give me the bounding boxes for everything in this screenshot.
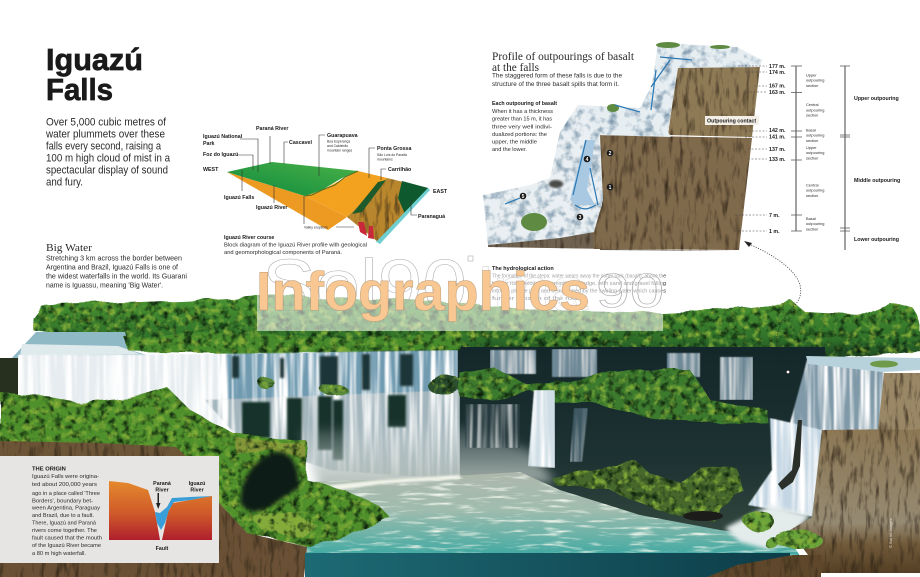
section labels: section bbox=[806, 156, 818, 160]
label: outpouring contact: Outpouring contact bbox=[707, 118, 756, 124]
origin text: Borders', boundary bet- bbox=[32, 498, 93, 504]
text: hydrological action: harder rock below, undermining the ledge, with sand and gravel falling bbox=[492, 281, 666, 287]
section labels: outpouring bbox=[806, 150, 824, 155]
diagram labels: Paraná River bbox=[256, 126, 288, 132]
watermark: Sol90 Infographics: 90 bbox=[596, 265, 664, 318]
diagram labels: Iguazú River bbox=[256, 205, 288, 211]
brown earth ledge bbox=[0, 441, 219, 560]
step number markers: 2 bbox=[609, 151, 612, 157]
small diagram notes: Boa Esperança bbox=[327, 140, 350, 144]
lower rock face bbox=[593, 135, 752, 250]
lower right white falls bbox=[748, 418, 822, 517]
intro text: spectacular display of sound bbox=[46, 164, 168, 176]
foam at falls base bbox=[725, 505, 810, 550]
section labels: Upper bbox=[806, 72, 817, 78]
section labels: Central bbox=[806, 102, 819, 107]
dark green ridges bbox=[398, 181, 428, 214]
height values: 1 m. bbox=[769, 229, 780, 235]
blue stream channel bbox=[570, 140, 595, 205]
left foreground foliage bbox=[0, 387, 390, 547]
orange plateau bbox=[305, 171, 387, 217]
bushes at right cliff foot bbox=[743, 510, 822, 549]
diagram labels: WEST bbox=[203, 167, 219, 173]
diagram labels: Guarapuava bbox=[327, 133, 358, 139]
dotted arrow: from photo to profile bbox=[744, 241, 801, 374]
section labels: outpouring bbox=[806, 108, 824, 112]
bottom-right paper edge bbox=[821, 573, 920, 577]
Big Water text: Argentina and Brazil, Iguazú Falls is one of bbox=[46, 262, 179, 272]
water pool bbox=[305, 472, 800, 556]
dark rear gorge wall bbox=[455, 347, 825, 537]
block diagram: Iguazú River profile bbox=[203, 126, 448, 244]
diagram labels: Carrilhão bbox=[388, 167, 412, 173]
origin text: ween Argentina, Paraguay bbox=[31, 506, 100, 512]
brown earth base bbox=[0, 503, 307, 577]
big right waterfall bbox=[787, 360, 884, 434]
watermark: Sol90 Infographics: Sol90 bbox=[262, 246, 467, 326]
photo credit: © Sol 90 Images bbox=[888, 518, 893, 548]
text: each outpouring of basalt: greater than 15 m, it has bbox=[492, 116, 552, 122]
flow arrows bbox=[505, 57, 692, 209]
origin text: ago in a place called 'Three bbox=[32, 491, 100, 497]
sunlit cliff top bbox=[236, 438, 305, 458]
outpouring labels: Middle outpouring bbox=[854, 178, 900, 184]
profile intro text: structure of the three basalt spills that form it. bbox=[492, 81, 619, 88]
title: Iguazú bbox=[46, 43, 143, 77]
rocks at island foot bbox=[683, 511, 723, 521]
photo: Iguazú waterfalls panorama bbox=[0, 296, 920, 577]
streaked cataract bbox=[220, 350, 458, 405]
diagram caption: Iguazú River course bbox=[224, 235, 274, 241]
height scale bbox=[735, 64, 900, 250]
diagram labels: Park bbox=[203, 141, 215, 147]
chart labels: River bbox=[155, 488, 169, 494]
dashed height guides bbox=[735, 66, 767, 231]
small diagram notes bbox=[304, 140, 407, 230]
profile intro text bbox=[492, 72, 622, 88]
upper rock face bbox=[668, 66, 760, 137]
text: each outpouring of basalt: Each outpouring of basalt bbox=[492, 101, 557, 107]
mist base of the falls bbox=[300, 425, 555, 490]
thin falls on dark wall bbox=[465, 404, 520, 448]
right cliff lower block bbox=[790, 429, 920, 573]
intro text: Over 5,000 cubic metres of bbox=[46, 116, 167, 128]
diagram labels: Paranaguá bbox=[418, 214, 445, 220]
heading: profile of outpourings: Profile of outpourings of basalt bbox=[492, 51, 635, 63]
label: outpouring contact bbox=[705, 116, 759, 125]
section scale axis bbox=[791, 66, 802, 231]
eastern terrain bbox=[347, 178, 428, 242]
section labels: outpouring bbox=[806, 221, 824, 226]
deep water front face bbox=[305, 553, 790, 577]
title bbox=[46, 43, 143, 107]
outpouring labels: Lower outpouring bbox=[854, 237, 899, 243]
diagram caption: and geomorphological components of Paraná. bbox=[224, 250, 342, 256]
small bush on right river bbox=[870, 360, 898, 368]
central island bbox=[552, 460, 743, 522]
heading: profile of outpourings bbox=[492, 51, 635, 74]
section labels: Central bbox=[806, 182, 819, 188]
right rear falls bbox=[490, 349, 753, 400]
brown front spur bbox=[707, 555, 822, 577]
ground strip bbox=[488, 232, 738, 251]
profile intro text: The staggered form of these falls is due to the bbox=[492, 72, 622, 80]
chart labels: River bbox=[190, 488, 204, 494]
dark strips in cataract bbox=[232, 354, 413, 390]
Big Water text: name is Iguassu, meaning 'Big Water'. bbox=[46, 280, 163, 290]
fault cross-section chart bbox=[109, 481, 212, 552]
white foam line bbox=[322, 475, 460, 490]
watermark: Sol90 Infographics: ima bbox=[478, 256, 589, 323]
height values: 7 m. bbox=[769, 213, 780, 219]
chart labels bbox=[153, 481, 205, 552]
origin text: and Brazil, due to a fault. bbox=[32, 513, 94, 519]
text: each outpouring of basalt: upper, the middle bbox=[492, 140, 537, 146]
diagram labels: Foz do Iguazú bbox=[203, 152, 238, 158]
diagram labels: Iguazú National bbox=[203, 134, 243, 140]
far forest canopy bbox=[33, 296, 920, 368]
text: each outpouring of basalt: three very well indivi- bbox=[492, 124, 552, 130]
arrow to Paraná River bbox=[156, 493, 160, 509]
dark cave in cliff bbox=[241, 452, 299, 512]
terrace vegetation bbox=[521, 42, 730, 231]
upper river, right bbox=[806, 356, 920, 372]
height values: 133 m. bbox=[769, 157, 786, 163]
intro text: and fury. bbox=[46, 176, 83, 188]
step number markers: 5 bbox=[522, 194, 525, 200]
chart labels: Fault bbox=[156, 546, 169, 552]
section labels: section bbox=[806, 193, 818, 198]
heading: profile of outpourings: at the falls bbox=[492, 62, 540, 74]
height values: 142 m. bbox=[769, 128, 786, 134]
heading: Big Water: Big Water bbox=[46, 242, 92, 254]
height values: 141 m. bbox=[769, 134, 786, 140]
upper water terrace bbox=[577, 43, 762, 137]
small diagram notes: mountains bbox=[377, 158, 393, 162]
lower tier of falls bbox=[205, 390, 460, 480]
underside of block bbox=[227, 172, 347, 230]
teal coast edge bbox=[376, 188, 430, 244]
section labels: outpouring bbox=[806, 78, 824, 82]
step number markers: 4 bbox=[586, 157, 589, 163]
intro text: 100 m high cloud of mist in a bbox=[46, 152, 171, 164]
section labels: section bbox=[806, 83, 818, 88]
text: hydrological action: The formation of the steps: water wears away the softer rock (basalt), above the bbox=[492, 274, 666, 280]
text: each outpouring of basalt: dualized portions: the bbox=[492, 132, 547, 138]
jagged plateau edge bbox=[305, 171, 358, 196]
small diagram notes: Valley eruptions bbox=[304, 226, 328, 230]
sunlit bushes bbox=[250, 512, 318, 536]
upper river, left bbox=[10, 332, 150, 360]
section labels: section bbox=[806, 226, 818, 232]
main white cataract bbox=[18, 354, 222, 425]
green plateau bbox=[227, 162, 358, 196]
section labels bbox=[806, 72, 824, 232]
height values: 174 m. bbox=[769, 70, 786, 76]
basalt block model bbox=[483, 42, 762, 251]
Big Water text: the widest waterfalls in the world. Its Guarani bbox=[46, 272, 187, 280]
outpouring scale axis bbox=[840, 66, 850, 250]
chart labels: Paraná bbox=[153, 481, 171, 487]
Big Water text bbox=[46, 254, 187, 290]
section labels: Basal bbox=[806, 216, 816, 221]
diagram labels: Iguazú Falls bbox=[224, 195, 254, 201]
outpouring labels: Upper outpouring bbox=[854, 96, 899, 102]
watermark: Sol90 Infographics bbox=[256, 246, 664, 331]
section labels: section bbox=[806, 112, 818, 118]
central falls bbox=[528, 390, 555, 468]
right cliff upper block bbox=[878, 373, 920, 430]
text: hydrological action: The hydrological action bbox=[492, 266, 554, 272]
section labels: section bbox=[806, 138, 818, 143]
diagram labels: Ponta Grossa bbox=[377, 146, 411, 152]
step number markers: 3 bbox=[579, 215, 582, 221]
height values: 163 m. bbox=[769, 90, 786, 96]
small diagram notes: and Caldeirão bbox=[327, 144, 348, 148]
diagram labels: EAST bbox=[433, 189, 448, 195]
text: hydrological action: further erosion of the rock. bbox=[492, 296, 583, 302]
section labels: outpouring bbox=[806, 132, 824, 138]
text: hydrological action: into the plunge pool and being stirred by the swirling water which causes bbox=[492, 288, 666, 294]
origin text bbox=[31, 466, 102, 557]
text: each outpouring of basalt: and the lower. bbox=[492, 147, 527, 153]
leader lines bbox=[238, 135, 417, 227]
origin text: rivers come together. The bbox=[32, 528, 97, 534]
text: hydrological action bbox=[492, 266, 666, 302]
small diagram notes: São Luís do Paraitá bbox=[377, 153, 407, 157]
height values: 177 m. bbox=[769, 64, 786, 70]
outpouring labels bbox=[854, 96, 900, 243]
height values: 137 m. bbox=[769, 147, 786, 153]
section labels: Basal bbox=[806, 128, 816, 132]
central green mound bbox=[460, 367, 768, 423]
intro text: water plummets over these bbox=[45, 128, 165, 140]
origin text: There, Iguazú and Paraná bbox=[32, 520, 97, 526]
height values bbox=[769, 64, 786, 235]
origin text: of the Iguazú River became bbox=[32, 543, 101, 549]
panel: the origin bbox=[0, 456, 219, 563]
origin text: ted about 200,000 years bbox=[32, 482, 97, 488]
diagram labels: Cascavel bbox=[289, 140, 313, 146]
rock ledge bushes bbox=[258, 375, 463, 396]
origin text: Iguazú Falls were origina- bbox=[32, 474, 99, 480]
diagram caption: Block diagram of the Iguazú River profile with geological bbox=[224, 242, 367, 248]
diagram caption bbox=[224, 235, 367, 256]
Big Water text: Stretching 3 km across the border between bbox=[46, 254, 182, 262]
intro text bbox=[45, 116, 171, 188]
dark rock in falls bbox=[778, 420, 802, 490]
step number markers bbox=[520, 150, 613, 221]
section labels: Upper bbox=[806, 145, 817, 150]
origin text: THE ORIGIN bbox=[32, 466, 66, 472]
origin text: fault caused that the mouth bbox=[32, 536, 102, 542]
text: each outpouring of basalt: When it has a thickness bbox=[492, 109, 553, 115]
watermark: Sol90 Infographics: Infographics bbox=[256, 260, 590, 322]
red strata bbox=[358, 222, 374, 239]
section labels: outpouring bbox=[806, 188, 824, 192]
small diagram notes: mountain ranges bbox=[327, 148, 353, 152]
origin text: a 80 m high waterfall. bbox=[32, 551, 86, 557]
dark rock pillars bbox=[242, 395, 406, 460]
text: each outpouring of basalt bbox=[492, 101, 557, 153]
title: Falls bbox=[46, 73, 113, 107]
step number markers: 1 bbox=[609, 185, 612, 191]
intro text: falls every second, raising a bbox=[46, 140, 162, 152]
diagram labels bbox=[203, 126, 448, 220]
height values: 167 m. bbox=[769, 84, 786, 90]
dark rocks at left edge bbox=[0, 358, 18, 398]
chart labels: Iguazú bbox=[189, 481, 205, 487]
dark rock at cascade shoulder bbox=[549, 180, 563, 188]
mid forest band bbox=[125, 332, 460, 354]
water cascade bbox=[483, 105, 603, 245]
